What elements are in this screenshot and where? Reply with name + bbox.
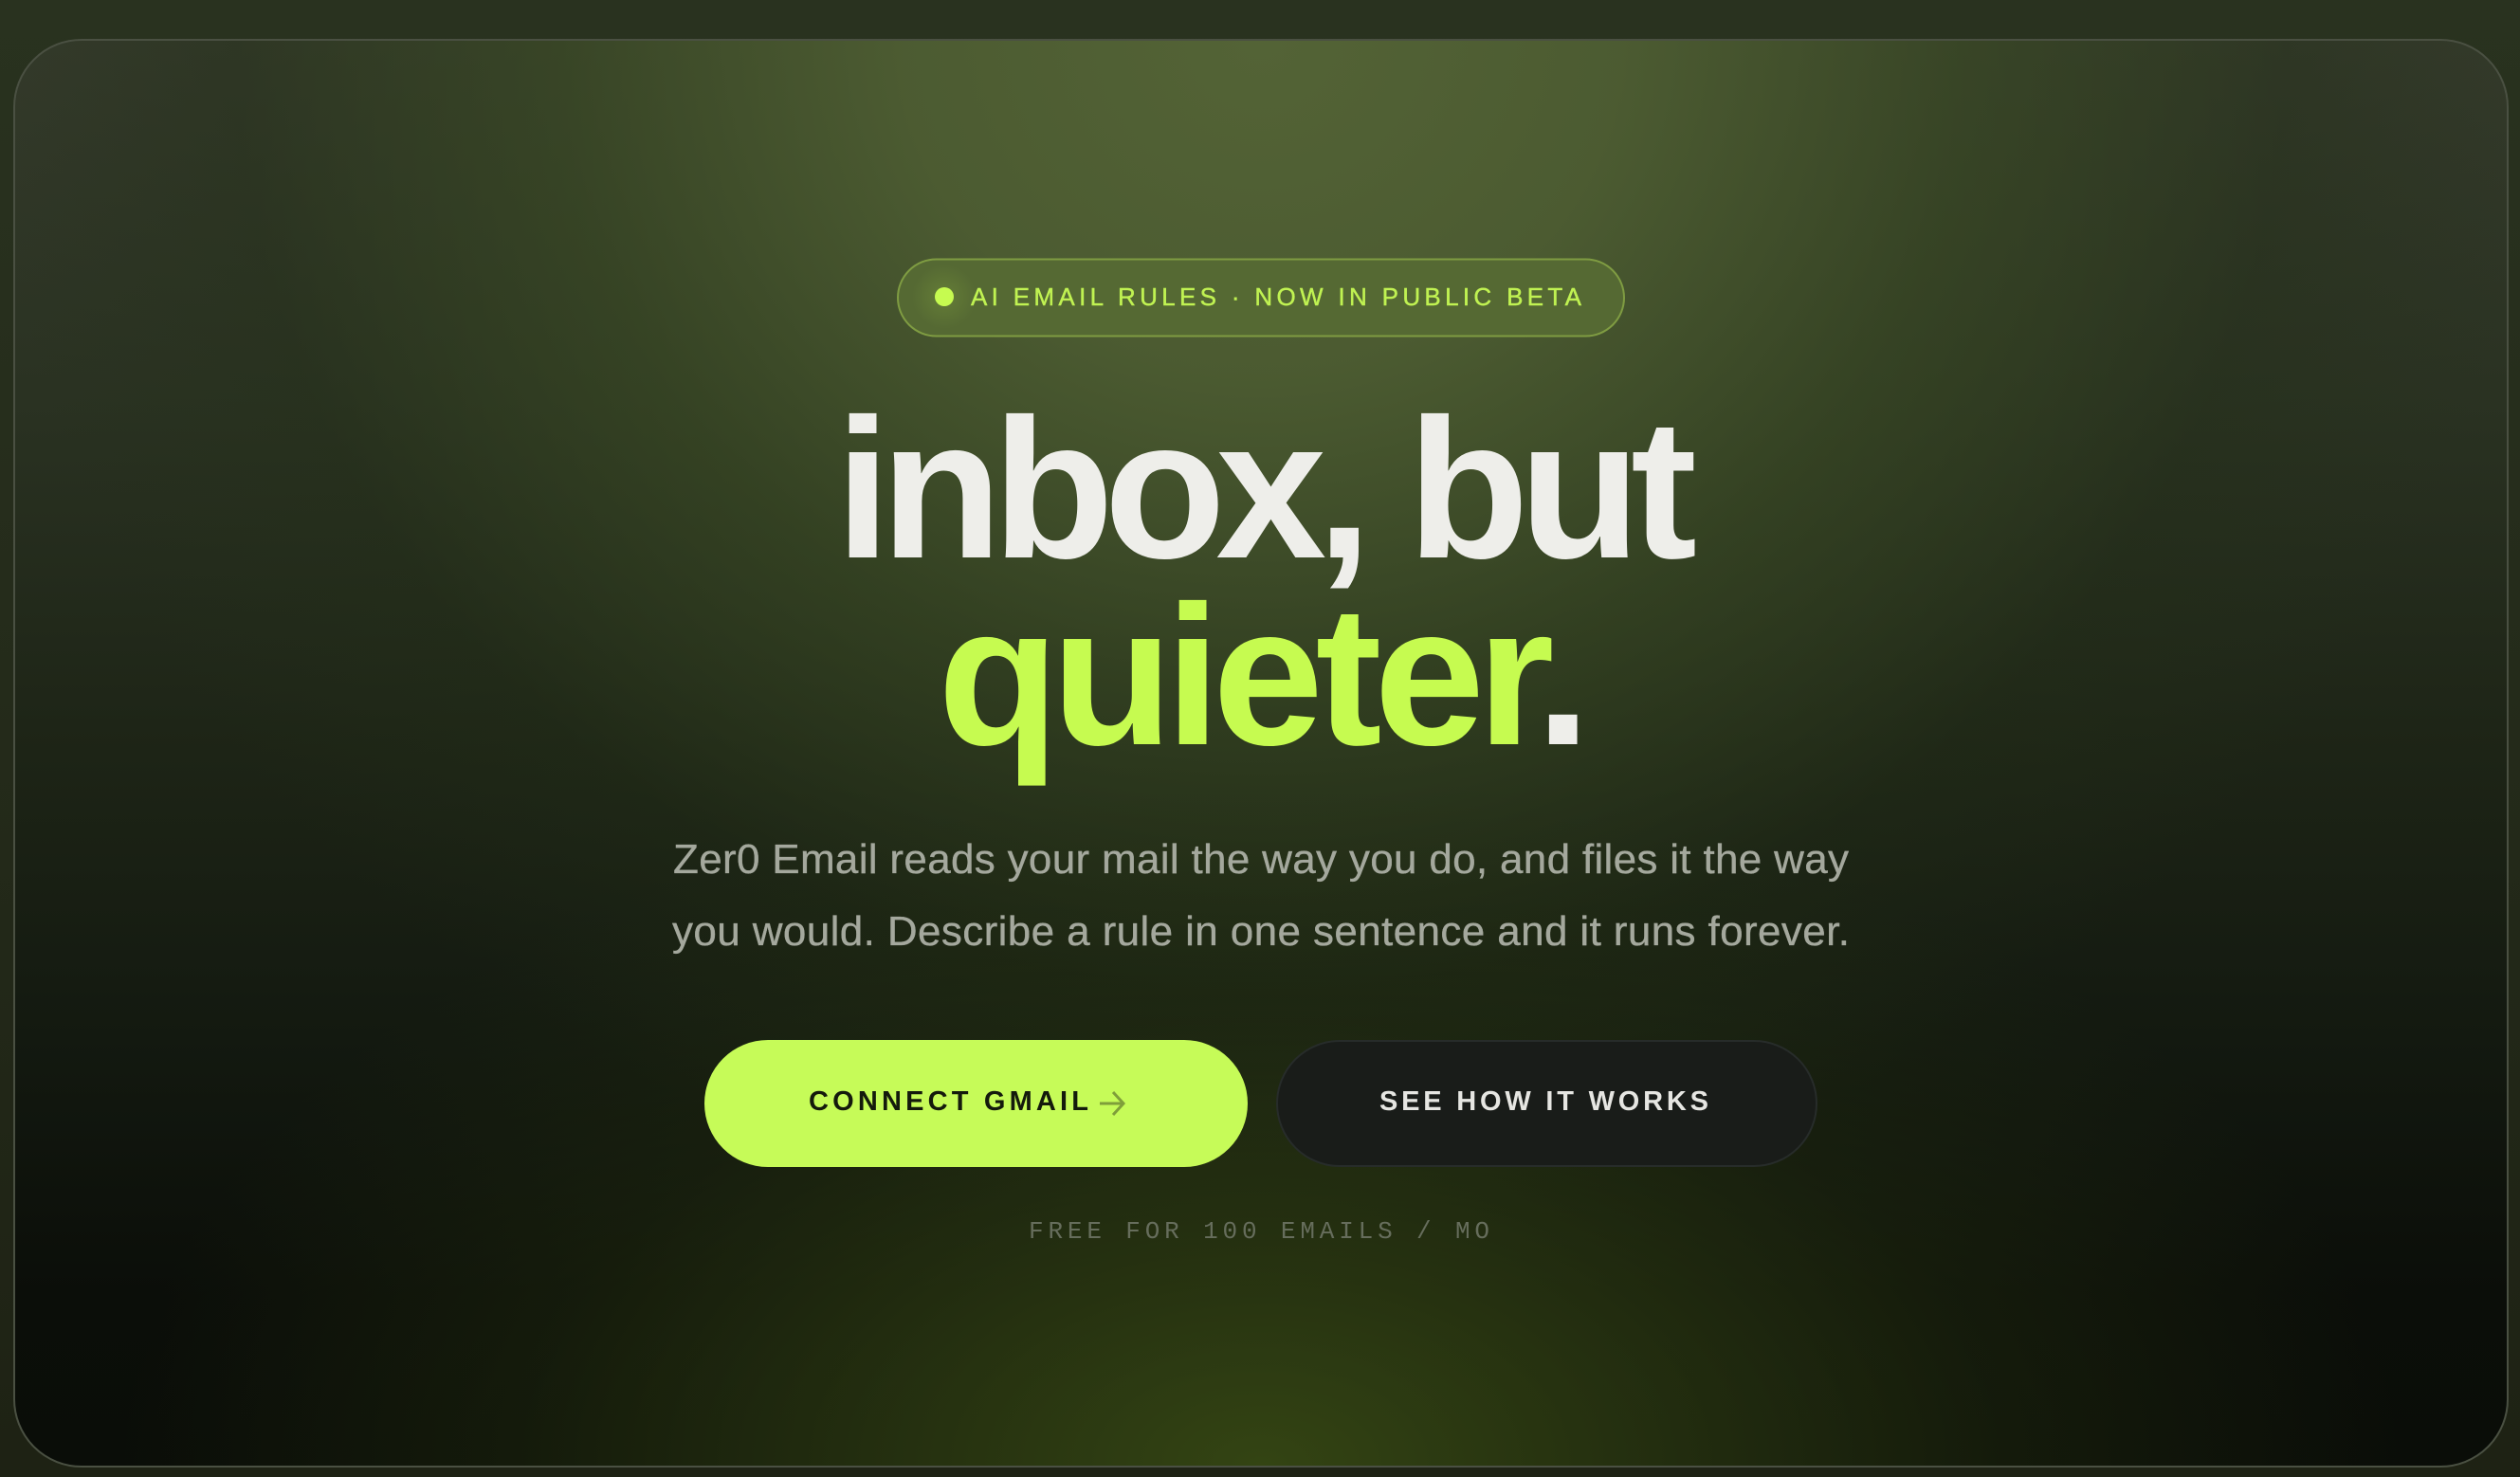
button label: CONNECT GMAIL [809,1086,1088,1117]
badge text: AI EMAIL RULES · NOW IN PUBLIC BETA [971,283,1582,311]
description [672,836,1850,955]
description line 2: you would. Describe a rule in one sentence and it runs forever. [672,908,1850,955]
description line 1: Zer0 Email reads your mail the way you do, and files it the way [673,836,1849,883]
icon: status dot [912,264,977,329]
title [835,377,1697,787]
primary button [704,1040,1248,1167]
title line 1: inbox, but [835,377,1697,600]
icon: arrow [1100,1092,1123,1115]
footnote: FREE FOR 100 EMAILS / MO [1029,1217,1489,1246]
secondary button [1277,1041,1817,1166]
button label: SEE HOW IT WORKS [1379,1086,1708,1117]
badge [898,260,1624,336]
title line 2: quieter. [938,564,1591,787]
